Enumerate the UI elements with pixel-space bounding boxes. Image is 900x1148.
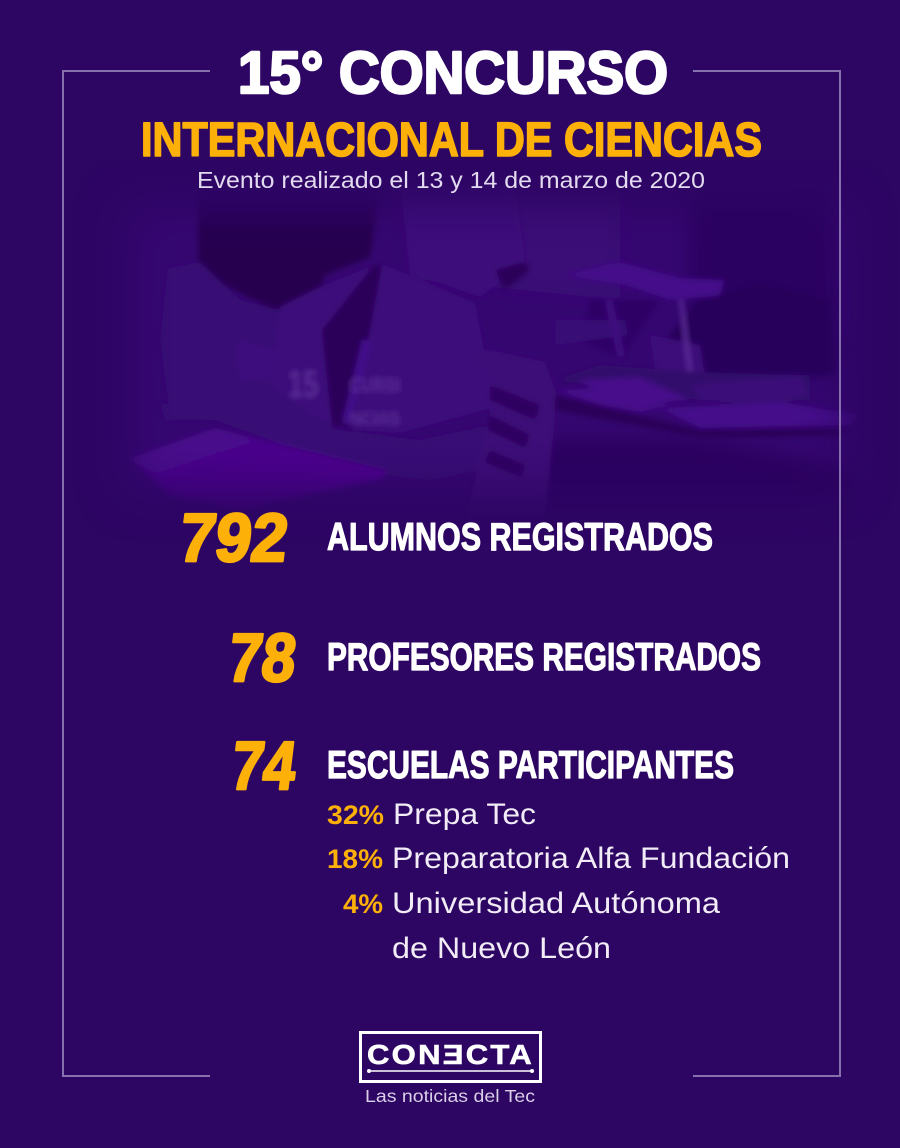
school breakdown list: 18% bbox=[327, 844, 383, 874]
stat: 78 profesores bbox=[224, 620, 761, 696]
stat: 78 profesores: PROFESORES REGISTRADOS bbox=[327, 636, 761, 679]
hand with pencil bbox=[653, 336, 706, 374]
chair front bbox=[473, 350, 556, 500]
stat: 792 alumnos: 792 bbox=[175, 500, 292, 576]
title: 15° CONCURSO: 15° CONCURSO bbox=[238, 40, 668, 106]
school breakdown list: 32% bbox=[327, 800, 384, 830]
school breakdown list: Universidad Autónoma bbox=[392, 887, 720, 920]
stat: 78 profesores: 78 bbox=[224, 620, 300, 696]
background person bbox=[406, 224, 494, 294]
stat: 74 escuelas: ESCUELAS PARTICIPANTES bbox=[327, 744, 734, 787]
shirt print: 15 bbox=[288, 364, 318, 406]
subtitle: Internacional de Ciencias: INTERNACIONAL DE CIENCIAS bbox=[141, 114, 762, 167]
school breakdown list: Prepa Tec bbox=[393, 798, 536, 831]
shirt bbox=[270, 263, 495, 433]
school breakdown list: de Nuevo León bbox=[392, 932, 611, 965]
logo: Conecta bbox=[360, 1032, 540, 1082]
chair behind student bbox=[168, 261, 280, 404]
stat: 74 escuelas: 74 bbox=[227, 728, 300, 804]
hair bbox=[196, 204, 376, 310]
photo: student writing at desk: CURSI bbox=[350, 375, 400, 397]
frame bbox=[63, 71, 840, 1076]
photo: student writing at desk: NCIAS bbox=[350, 409, 400, 429]
desk papers upper right bbox=[565, 262, 725, 300]
lanyard bbox=[322, 265, 382, 428]
stat: 792 alumnos bbox=[175, 500, 713, 576]
dark torso at right bbox=[668, 294, 833, 376]
tagline: Las noticias del Tec bbox=[365, 1086, 535, 1106]
school breakdown list: 4% bbox=[343, 889, 383, 919]
stat: 792 alumnos: ALUMNOS REGISTRADOS bbox=[327, 516, 713, 559]
stat: 74 escuelas bbox=[227, 728, 734, 804]
paper left bbox=[130, 428, 385, 510]
logo: Conecta: CONƎCTA bbox=[367, 1039, 534, 1070]
arm bbox=[165, 397, 491, 474]
event date: Evento realizado el 13 y 14 de marzo de 2020 bbox=[197, 167, 705, 193]
desk right bbox=[555, 365, 810, 400]
photo: student writing at desk bbox=[129, 196, 856, 506]
school breakdown list: Preparatoria Alfa Fundación bbox=[392, 842, 790, 875]
school breakdown list bbox=[327, 798, 790, 965]
